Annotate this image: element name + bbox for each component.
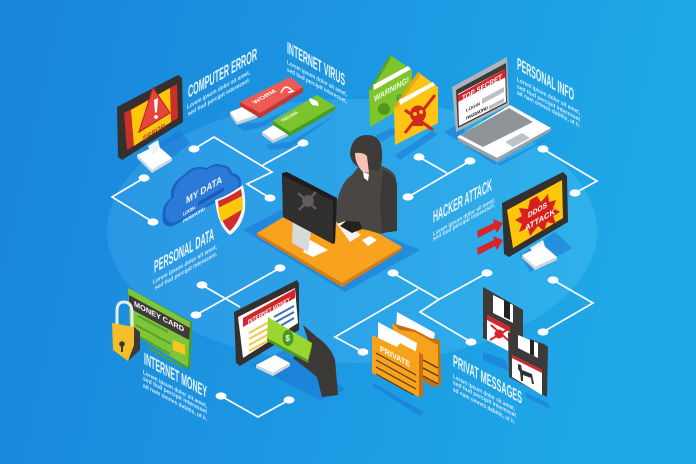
icon: yellow skull envelope bbox=[394, 72, 438, 160]
icon: cloud: LOGIN bbox=[183, 205, 195, 218]
panel: warning envelopes bbox=[369, 55, 438, 160]
text block: internet virus: sed tiud percipit interesset. bbox=[287, 66, 347, 105]
text block: internet money: ad nam omnes dabitis, ut ii. bbox=[143, 382, 207, 423]
text block: privat messages: ad nam omnes dabitis, ut ii. bbox=[453, 386, 515, 426]
central ellipse bbox=[107, 99, 597, 363]
icon: laptop: TOP SECRET bbox=[462, 72, 502, 103]
panel: internet money bbox=[112, 280, 345, 423]
icon: desk bbox=[257, 233, 402, 287]
icon: internet money monitor: INTERNET MONEY bbox=[248, 296, 291, 326]
icon: cloud: MY DATA bbox=[186, 174, 222, 207]
text block: internet virus: Lorem ipsum dolor sit amet, bbox=[287, 59, 347, 98]
icon: cloud: PASSWORD bbox=[183, 206, 205, 225]
circuit connectors bbox=[112, 137, 597, 417]
panel: privat messages: PRIVAT MESSAGES bbox=[453, 350, 522, 408]
icon: hacker monitor bbox=[282, 172, 337, 257]
panel: personal data bbox=[153, 164, 245, 292]
icon: laptop: PASSWORD bbox=[466, 105, 489, 122]
panel: computer error bbox=[117, 44, 257, 173]
icon: error monitor: ERROR bbox=[143, 121, 165, 143]
panel: internet money: INTERNET MONEY bbox=[144, 349, 207, 402]
icon: ddos monitor bbox=[502, 172, 572, 272]
panel: internet virus bbox=[230, 37, 347, 150]
panel: privat messages bbox=[372, 287, 550, 426]
icon: cash: $ bbox=[286, 334, 290, 343]
icon: floppy disks bbox=[483, 287, 550, 409]
text block: hacker attack: Lorem ipsum dolor sit amet, bbox=[433, 197, 495, 238]
text block: internet money: sed tiud percipit interesset bbox=[143, 375, 208, 416]
icon: money card bbox=[128, 288, 192, 369]
icon: internet money monitor bbox=[234, 280, 345, 400]
icon: ddos monitor: DDOS bbox=[528, 200, 547, 220]
panel: personal data: PERSONAL DATA bbox=[154, 224, 214, 277]
icon: hand bbox=[293, 325, 338, 397]
icon: hand bbox=[340, 221, 362, 233]
text block: personal data: Lorem ipsum dolor sit amet, bbox=[153, 243, 217, 286]
icon: mouse bbox=[362, 236, 377, 246]
icon: private folders bbox=[372, 312, 441, 398]
text block: personal info: ad nam omnes dabitis, ut ii. bbox=[517, 89, 580, 129]
icon: laptop bbox=[444, 57, 560, 166]
icon: trojan horse usb: TROJAN bbox=[280, 111, 300, 123]
desk shadow bbox=[243, 200, 420, 292]
text block: computer error: Lorem ipsum dolor sit amet, bbox=[187, 69, 250, 111]
text block: computer error: sed tiud percipit interesset. bbox=[188, 77, 250, 118]
icon: hacker bbox=[334, 135, 397, 242]
icon: keyboard bbox=[337, 221, 361, 242]
icon: shield bbox=[215, 185, 245, 235]
icon: worm usb: WORM bbox=[251, 89, 278, 105]
text block: privat messages: sed tiud percipit interesset bbox=[453, 379, 517, 420]
panel: hacker attack: HACKER ATTACK bbox=[433, 174, 492, 227]
panel: hacker attack bbox=[433, 172, 572, 272]
icon: skull bbox=[405, 95, 435, 133]
text block: privat messages: Lorem ipsum dolor sit amet, bbox=[453, 373, 515, 413]
text block: internet money: Lorem ipsum dolor sit amet, bbox=[143, 369, 207, 410]
panel: personal info bbox=[444, 53, 581, 166]
text block: personal data: sed tiud percipit interesset. bbox=[155, 251, 217, 292]
icon: laptop: LOGIN bbox=[466, 101, 481, 114]
icon: folder shadow bbox=[372, 384, 424, 416]
infographic canvas: INTERNET VIRUS bbox=[287, 37, 345, 90]
text block: hacker attack: sed tiud percipit interesset. bbox=[433, 202, 495, 243]
infographic canvas: PERSONAL INFO bbox=[517, 53, 574, 105]
text block: internet virus bbox=[287, 59, 347, 105]
text block: personal info: sed tiud percipit interesset bbox=[517, 83, 581, 124]
icon: private folders: PRIVATE bbox=[380, 344, 410, 369]
icon: ddos monitor: ATTACK bbox=[525, 206, 556, 233]
text block: personal info: Lorem ipsum dolor sit amet, bbox=[517, 76, 580, 116]
icon: money card: MONEY CARD bbox=[134, 299, 184, 334]
icon: cloud bbox=[162, 164, 241, 226]
icon: green warning envelope: WARNING! bbox=[374, 75, 409, 104]
panel: central hacker bbox=[243, 135, 420, 292]
icon: cash bbox=[267, 317, 312, 363]
icon: padlock bbox=[112, 302, 140, 361]
arrows: attack bbox=[477, 219, 503, 255]
